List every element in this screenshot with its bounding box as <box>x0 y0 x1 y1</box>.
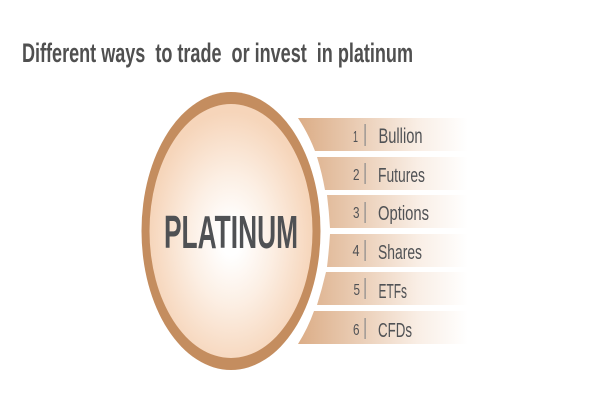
band 6: CFDs: CFDs <box>378 320 412 342</box>
band 2: Futures <box>317 157 468 190</box>
band 1: Bullion: Bullion <box>378 125 422 148</box>
band 5: ETFs: 5 <box>354 282 360 299</box>
ellipse label: PLATINUM <box>164 206 298 258</box>
band 2: Futures: 2 <box>353 167 360 184</box>
band 2: Futures: Futures <box>378 165 425 187</box>
band 4: Shares: 4 <box>352 243 360 260</box>
band 4: Shares: Shares <box>378 242 422 264</box>
band 1: Bullion <box>298 118 468 151</box>
band 1: Bullion: 1 <box>353 129 358 146</box>
title: Different ways to trade or invest in platinum <box>22 38 413 68</box>
band 5: ETFs <box>317 272 468 305</box>
band 5: ETFs: ETFs <box>378 281 407 303</box>
band 3: Options: 3 <box>353 205 360 222</box>
band 3: Options <box>327 195 468 228</box>
band 3: Options: Options <box>378 203 429 225</box>
platinum ellipse <box>142 92 320 370</box>
band 4: Shares <box>327 234 468 267</box>
band 6: CFDs: 6 <box>353 322 360 339</box>
band 6: CFDs <box>298 311 468 344</box>
